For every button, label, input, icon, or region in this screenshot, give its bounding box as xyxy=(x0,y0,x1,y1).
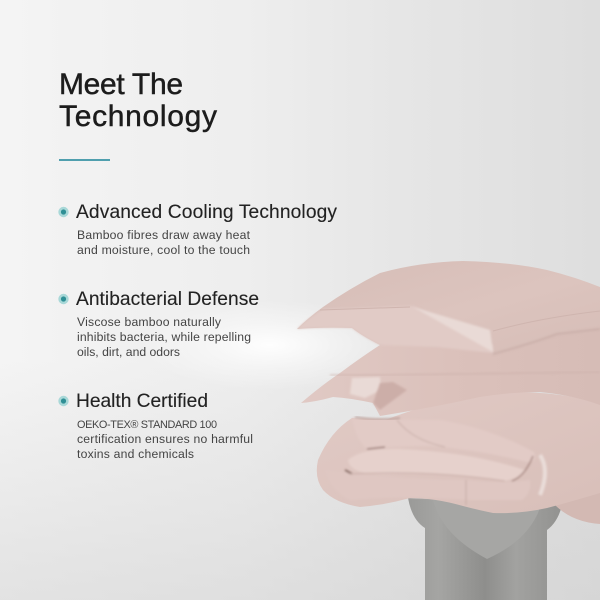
description: antibacterial defense: oils, dirt, and odors xyxy=(77,345,180,359)
bright corner fold xyxy=(413,307,493,352)
crease above fold xyxy=(355,417,400,419)
icon: teal bullet xyxy=(58,396,69,406)
description: health certified: OEKO-TEX® STANDARD 100 xyxy=(77,419,217,431)
illustration: stone bust pedestal xyxy=(408,498,562,600)
pillow flange highlight xyxy=(350,377,381,398)
description: advanced cooling xyxy=(77,228,251,257)
description: antibacterial defense: Viscose bamboo naturally xyxy=(77,315,222,329)
feature: health certified xyxy=(58,391,253,461)
description: advanced cooling: Bamboo fibres draw away heat xyxy=(77,228,251,242)
heading: antibacterial defense: Antibacterial Defense xyxy=(76,289,259,310)
divider accent line xyxy=(59,159,110,161)
flange seams xyxy=(320,307,410,310)
feature: advanced cooling xyxy=(58,202,337,257)
heading: advanced cooling technology: Advanced Cooling Technology xyxy=(76,202,337,223)
rear fold xyxy=(555,490,600,524)
description: antibacterial defense: inhibits bacteria, while repelling xyxy=(77,330,251,344)
pillow flange xyxy=(297,306,493,353)
illustration: top pillow xyxy=(297,261,600,354)
illustration: folded duvet xyxy=(317,392,600,524)
title xyxy=(59,68,217,133)
shadow on lower pillow xyxy=(493,329,600,354)
icon: teal bullet xyxy=(58,294,69,304)
title: Meet The xyxy=(59,68,183,101)
description: health certified: toxins and chemicals xyxy=(77,447,194,461)
duvet folds xyxy=(325,418,545,505)
icon: teal bullet xyxy=(58,207,69,217)
title: Technology xyxy=(59,100,217,133)
flange shadow xyxy=(373,382,407,410)
description: antibacterial defense xyxy=(77,315,251,359)
description: health certified: certification ensures no harmful xyxy=(77,432,253,446)
heading: health certified: Health Certified xyxy=(76,391,208,412)
description: health certified xyxy=(77,419,253,461)
description: advanced cooling: and moisture, cool to the touch xyxy=(77,243,250,257)
feature: antibacterial defense xyxy=(58,289,259,359)
duvet body xyxy=(317,392,600,513)
illustration: lower pillow xyxy=(301,320,600,416)
flange seam xyxy=(330,372,600,375)
